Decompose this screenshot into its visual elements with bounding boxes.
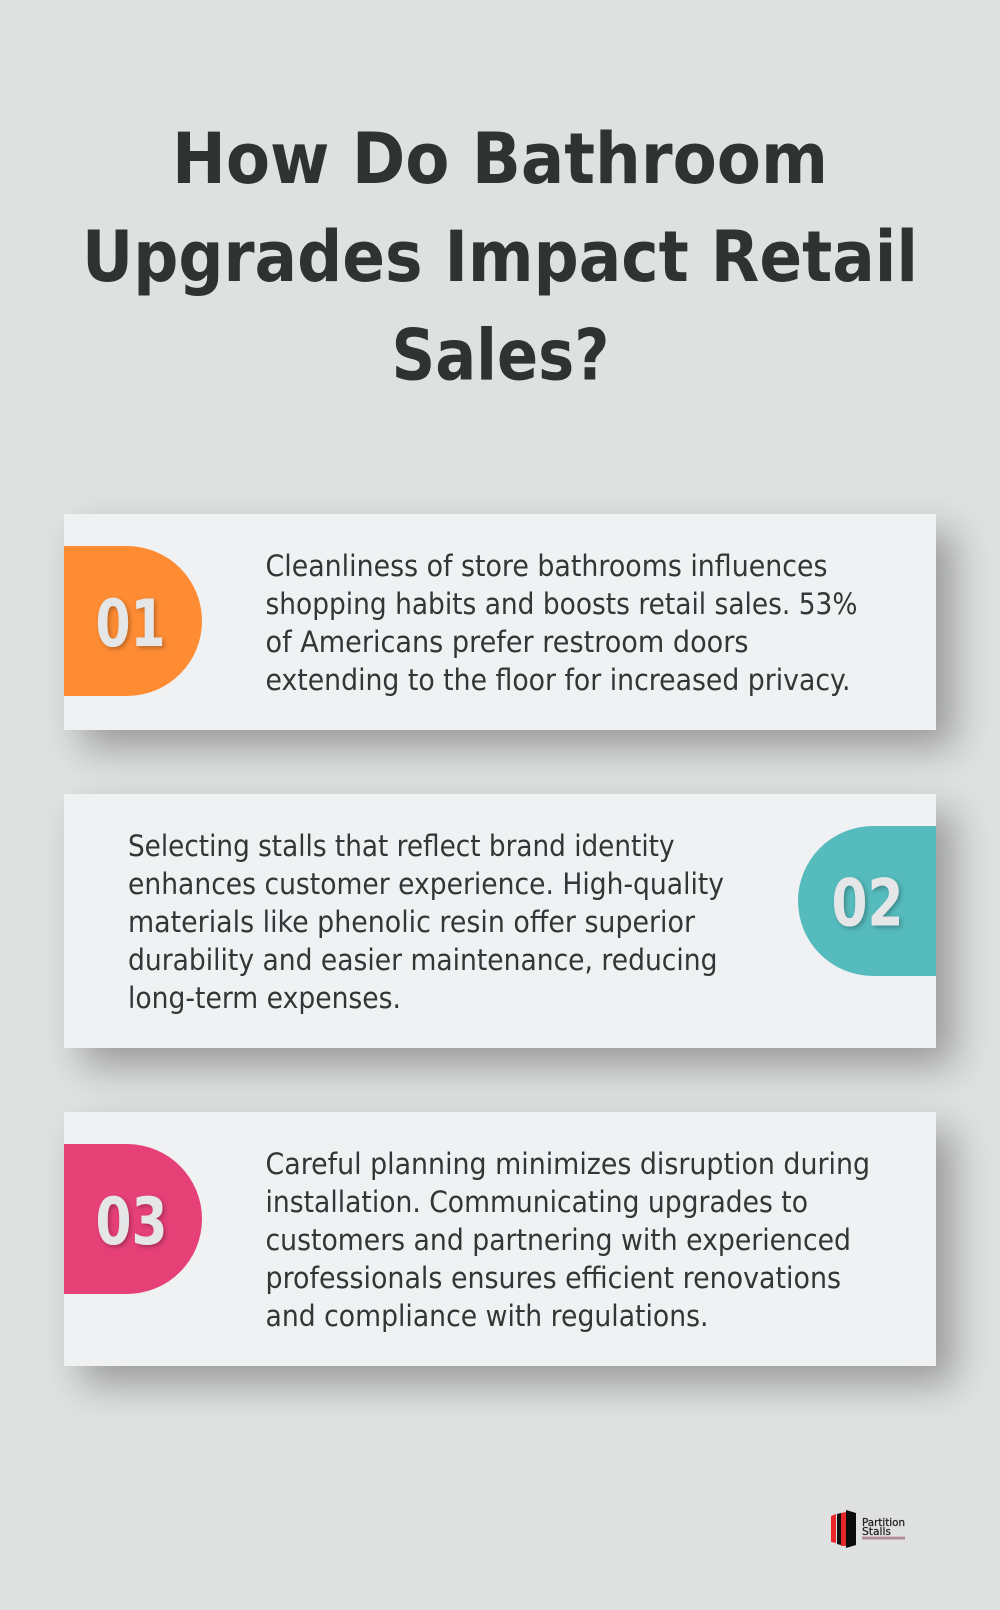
text: step 01: extending to the floor for increased privacy.: [266, 663, 850, 697]
text: step 02: enhances customer experience. High-quality: [128, 867, 724, 901]
text: step 01: Cleanliness of store bathrooms influences: [266, 549, 828, 583]
text: step 01: [266, 549, 858, 697]
badge: 01: 01: [96, 587, 166, 662]
panel: step 01: [64, 514, 954, 748]
panel: step 03: [64, 1112, 954, 1384]
badge: 01: [64, 546, 202, 696]
text: step 02: Selecting stalls that reflect brand identity: [128, 829, 674, 863]
title: Upgrades Impact Retail: [82, 216, 918, 298]
title: [82, 118, 918, 396]
text: step 02: long-term expenses.: [128, 981, 401, 1015]
logo: Partition Stalls: Partition: [862, 1517, 905, 1529]
badge: 02: 02: [832, 866, 904, 942]
text: step 03: Careful planning minimizes disruption during: [266, 1147, 870, 1181]
badge: 03: 03: [96, 1185, 168, 1260]
text: step 03: professionals ensures efficient renovations: [266, 1261, 841, 1295]
text: step 01: shopping habits and boosts retail sales. 53%: [266, 587, 858, 621]
text: step 03: installation. Communicating upgrades to: [266, 1185, 808, 1219]
badge: 03: [64, 1144, 202, 1294]
logo: Partition Stalls: Stalls: [862, 1526, 891, 1538]
badge: 02: [798, 826, 936, 976]
text: step 01: of Americans prefer restroom doors: [266, 625, 748, 659]
title: Sales?: [392, 314, 610, 396]
panel: step 02: [64, 794, 954, 1066]
text: step 02: durability and easier maintenance, reducing: [128, 943, 718, 977]
title: How Do Bathroom: [172, 118, 828, 200]
text: step 03: customers and partnering with experienced: [266, 1223, 851, 1257]
text: step 03: [266, 1147, 870, 1333]
text: step 02: materials like phenolic resin offer superior: [128, 905, 695, 939]
icon: partition bars: [831, 1510, 856, 1548]
logo: Partition Stalls: [831, 1510, 905, 1548]
text: step 03: and compliance with regulations.: [266, 1299, 708, 1333]
text: step 02: [128, 829, 724, 1015]
